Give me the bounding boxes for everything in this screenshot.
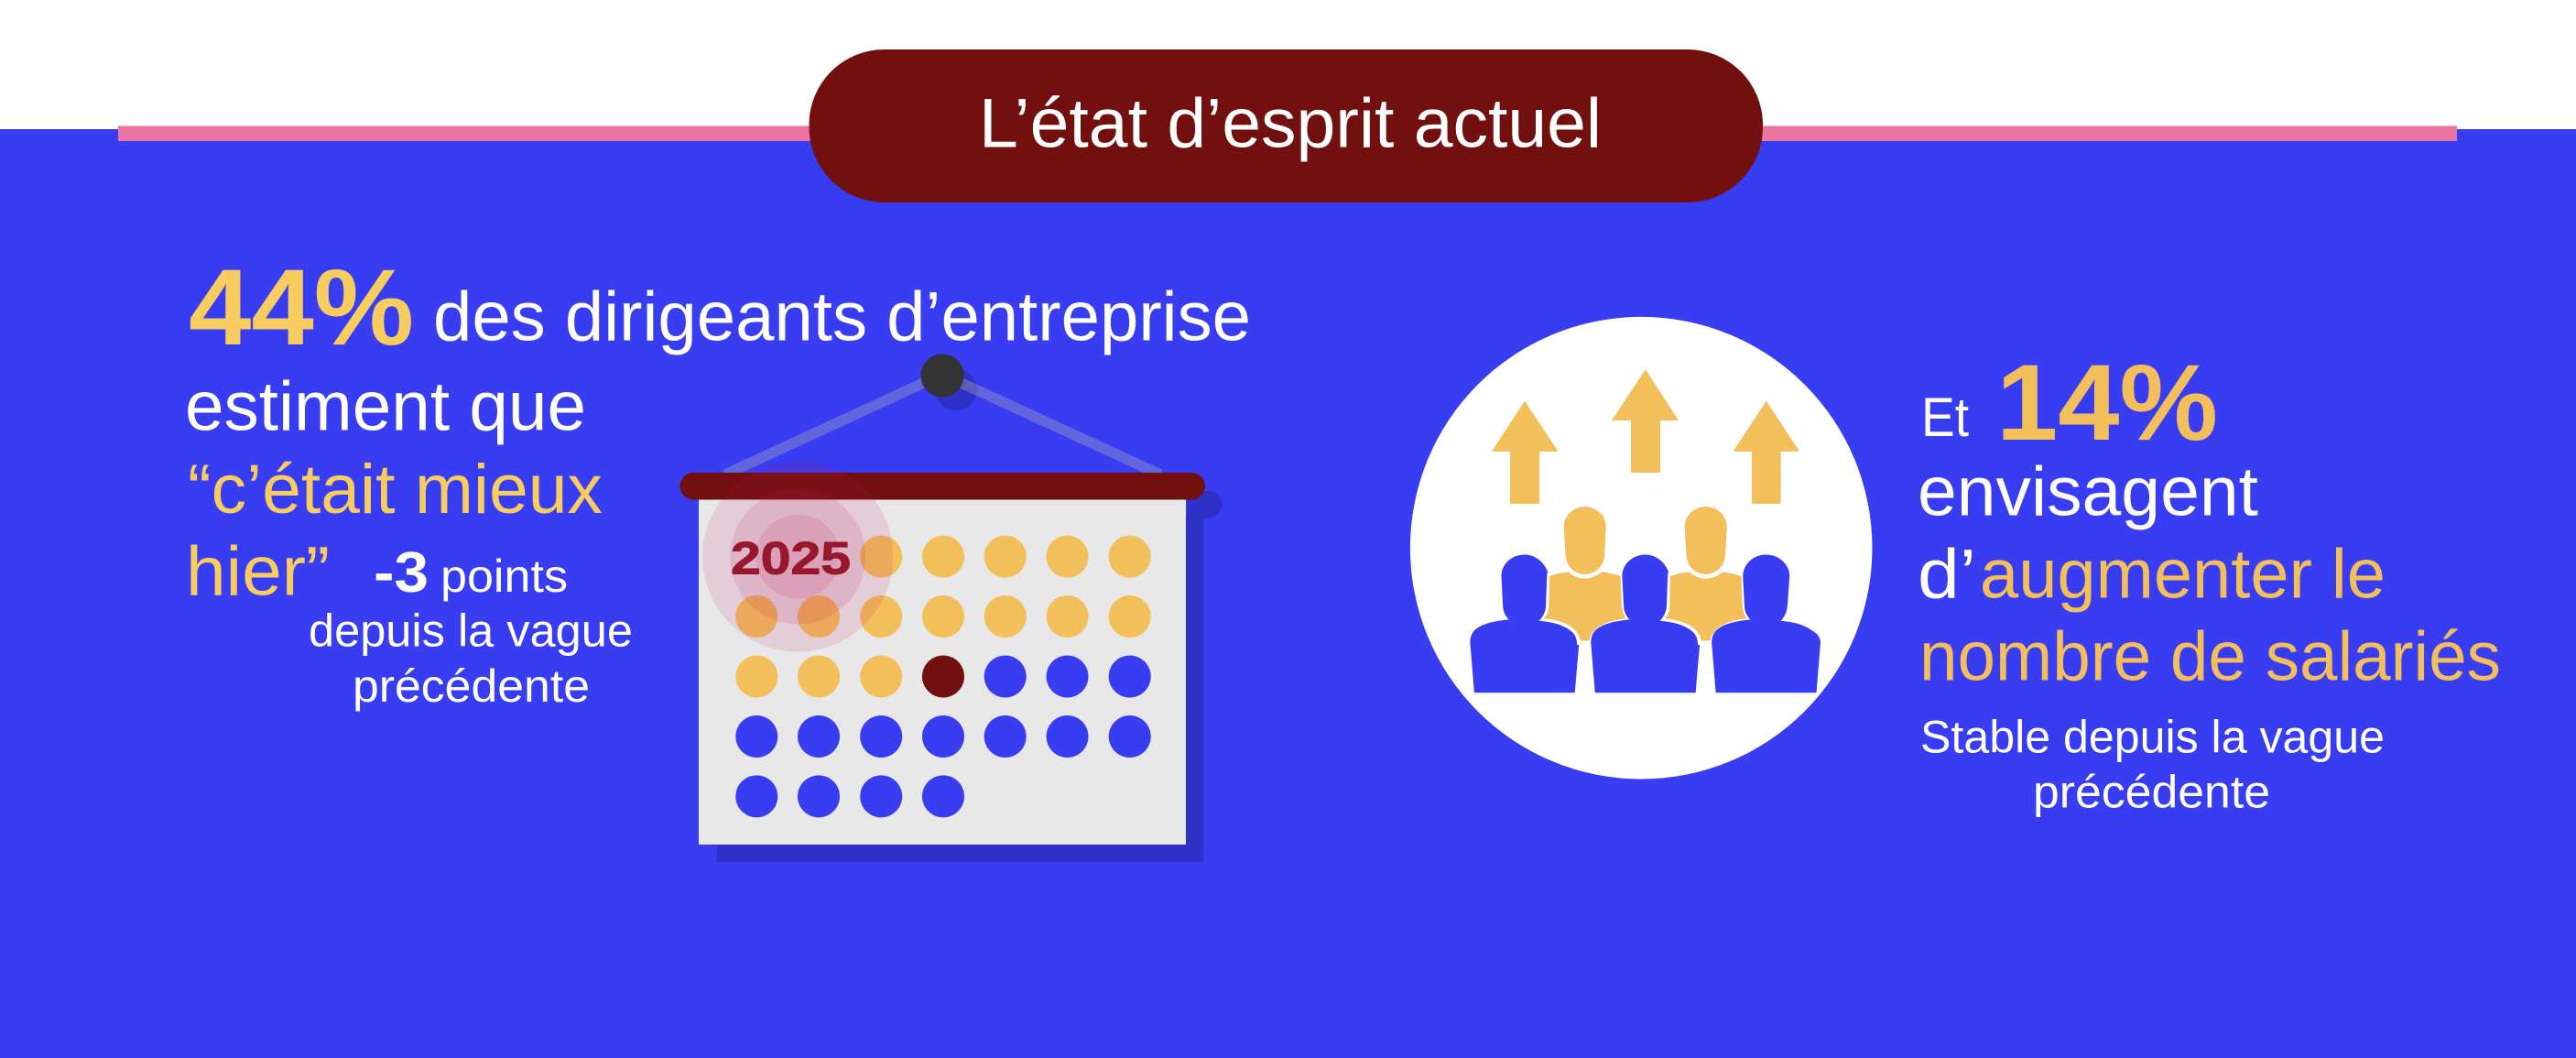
note line 2: depuis la vague <box>309 605 633 657</box>
calendar icon <box>679 354 1223 862</box>
word: Et: Et <box>1921 387 1969 448</box>
line: envisagent: envisagent <box>1918 453 2258 531</box>
current day dot <box>922 656 964 698</box>
quote line 2: hier” <box>186 532 330 610</box>
title pill: L’état d’esprit actuel <box>979 85 1602 163</box>
title pill <box>810 49 1763 202</box>
hanging bar <box>679 473 1205 500</box>
calendar shadow <box>717 491 1223 862</box>
arrows up <box>1492 369 1799 504</box>
hanging string <box>725 374 1160 474</box>
white circle <box>1410 317 1872 779</box>
pin <box>921 354 963 398</box>
line: augmenter le: augmenter le <box>1980 536 2386 614</box>
right note: stable depuis la vague précédente <box>1920 712 2385 818</box>
people <box>1470 507 1821 693</box>
line: nombre de salariés: nombre de salariés <box>1919 618 2501 696</box>
white circle icon: growing team <box>1410 317 1872 779</box>
stat: 44%: 44% <box>189 247 414 368</box>
right text block: 14% <box>1918 343 2501 696</box>
note line 3: précédente <box>353 660 590 712</box>
front person right <box>1712 554 1821 693</box>
pink header line <box>118 126 2457 141</box>
back person left <box>1544 507 1626 640</box>
year label: 2025 <box>731 533 851 584</box>
blue day dots <box>735 656 1151 817</box>
line: d': d’ <box>1918 536 1976 614</box>
left text block: 44% <box>185 247 1251 610</box>
note line 1: Stable depuis la vague <box>1920 712 2385 763</box>
word: points: points <box>440 551 568 602</box>
pin shadow <box>935 368 977 410</box>
line: estiment que: estiment que <box>185 367 586 445</box>
gold day dots <box>735 536 1151 698</box>
note line 2: précédente <box>2033 767 2270 818</box>
back person right <box>1665 507 1746 640</box>
stat: 14%: 14% <box>1996 343 2218 464</box>
front person left <box>1470 554 1579 693</box>
line: des dirigeants d'entreprise: des dirigeants d’entreprise <box>433 278 1251 356</box>
calendar paper <box>699 499 1186 845</box>
highlight rings <box>702 462 893 652</box>
left note: -3 points depuis la vague précédente <box>309 541 633 712</box>
quote line 1: “c’était mieux <box>188 451 603 529</box>
delta: -3: -3 <box>374 541 429 605</box>
front person centre <box>1591 554 1700 693</box>
